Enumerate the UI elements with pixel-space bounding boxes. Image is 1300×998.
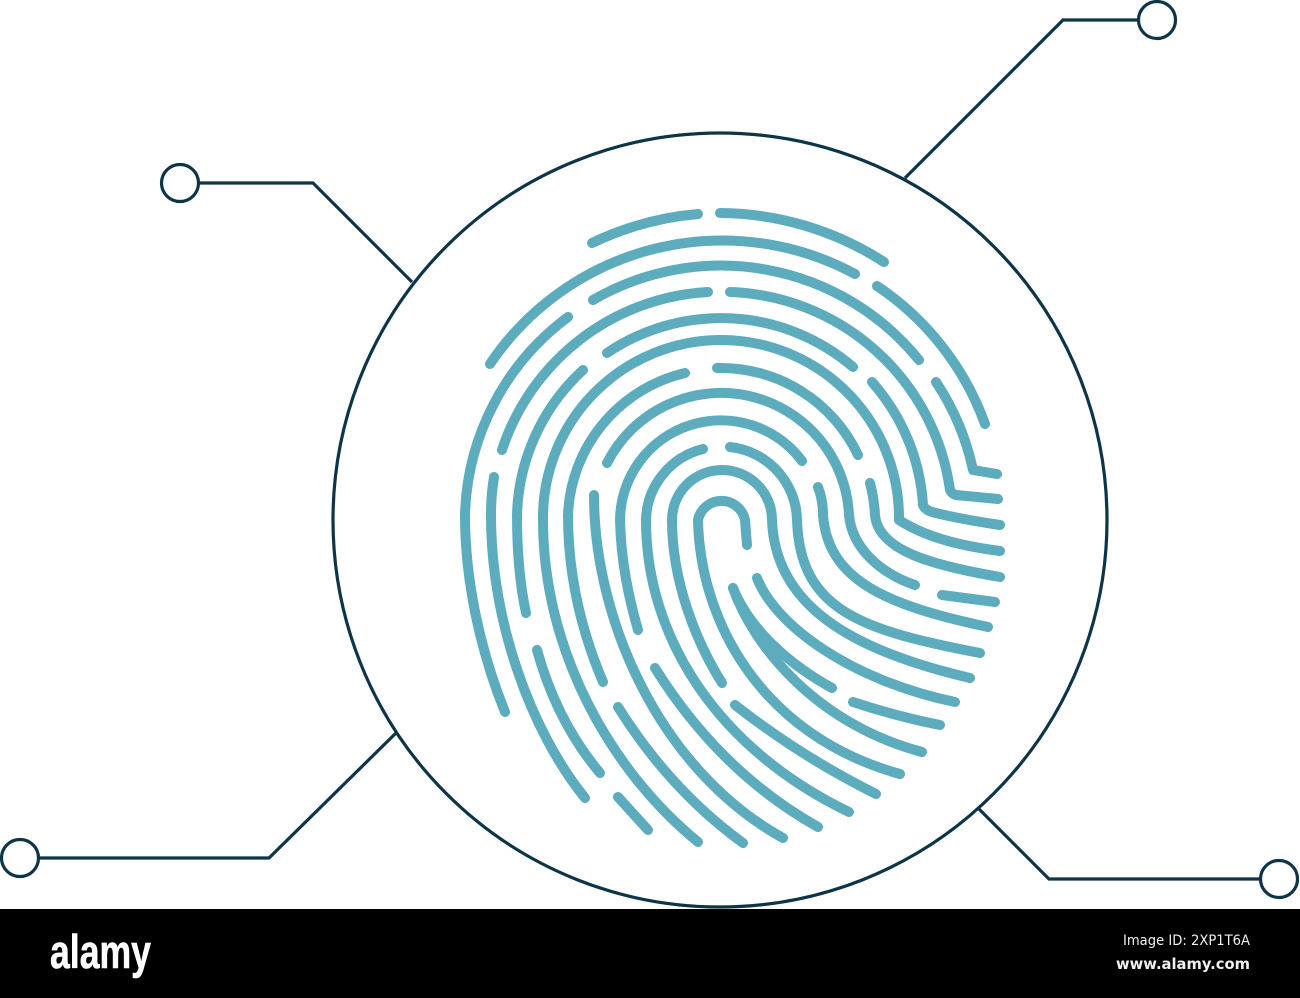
website url: www.alamy.com bbox=[1116, 955, 1250, 973]
logo: alamy: alamy bbox=[50, 925, 151, 978]
outer circle bbox=[333, 133, 1107, 907]
connector: bottom left bbox=[2, 733, 396, 876]
connector: top right bbox=[905, 2, 1176, 178]
footer bar bbox=[0, 909, 1300, 998]
connector: top left bbox=[162, 164, 412, 282]
icon: fingerprint bbox=[465, 213, 1000, 843]
connector: bottom right bbox=[979, 809, 1298, 898]
image id: Image ID: 2XP1T6A bbox=[1123, 933, 1250, 949]
